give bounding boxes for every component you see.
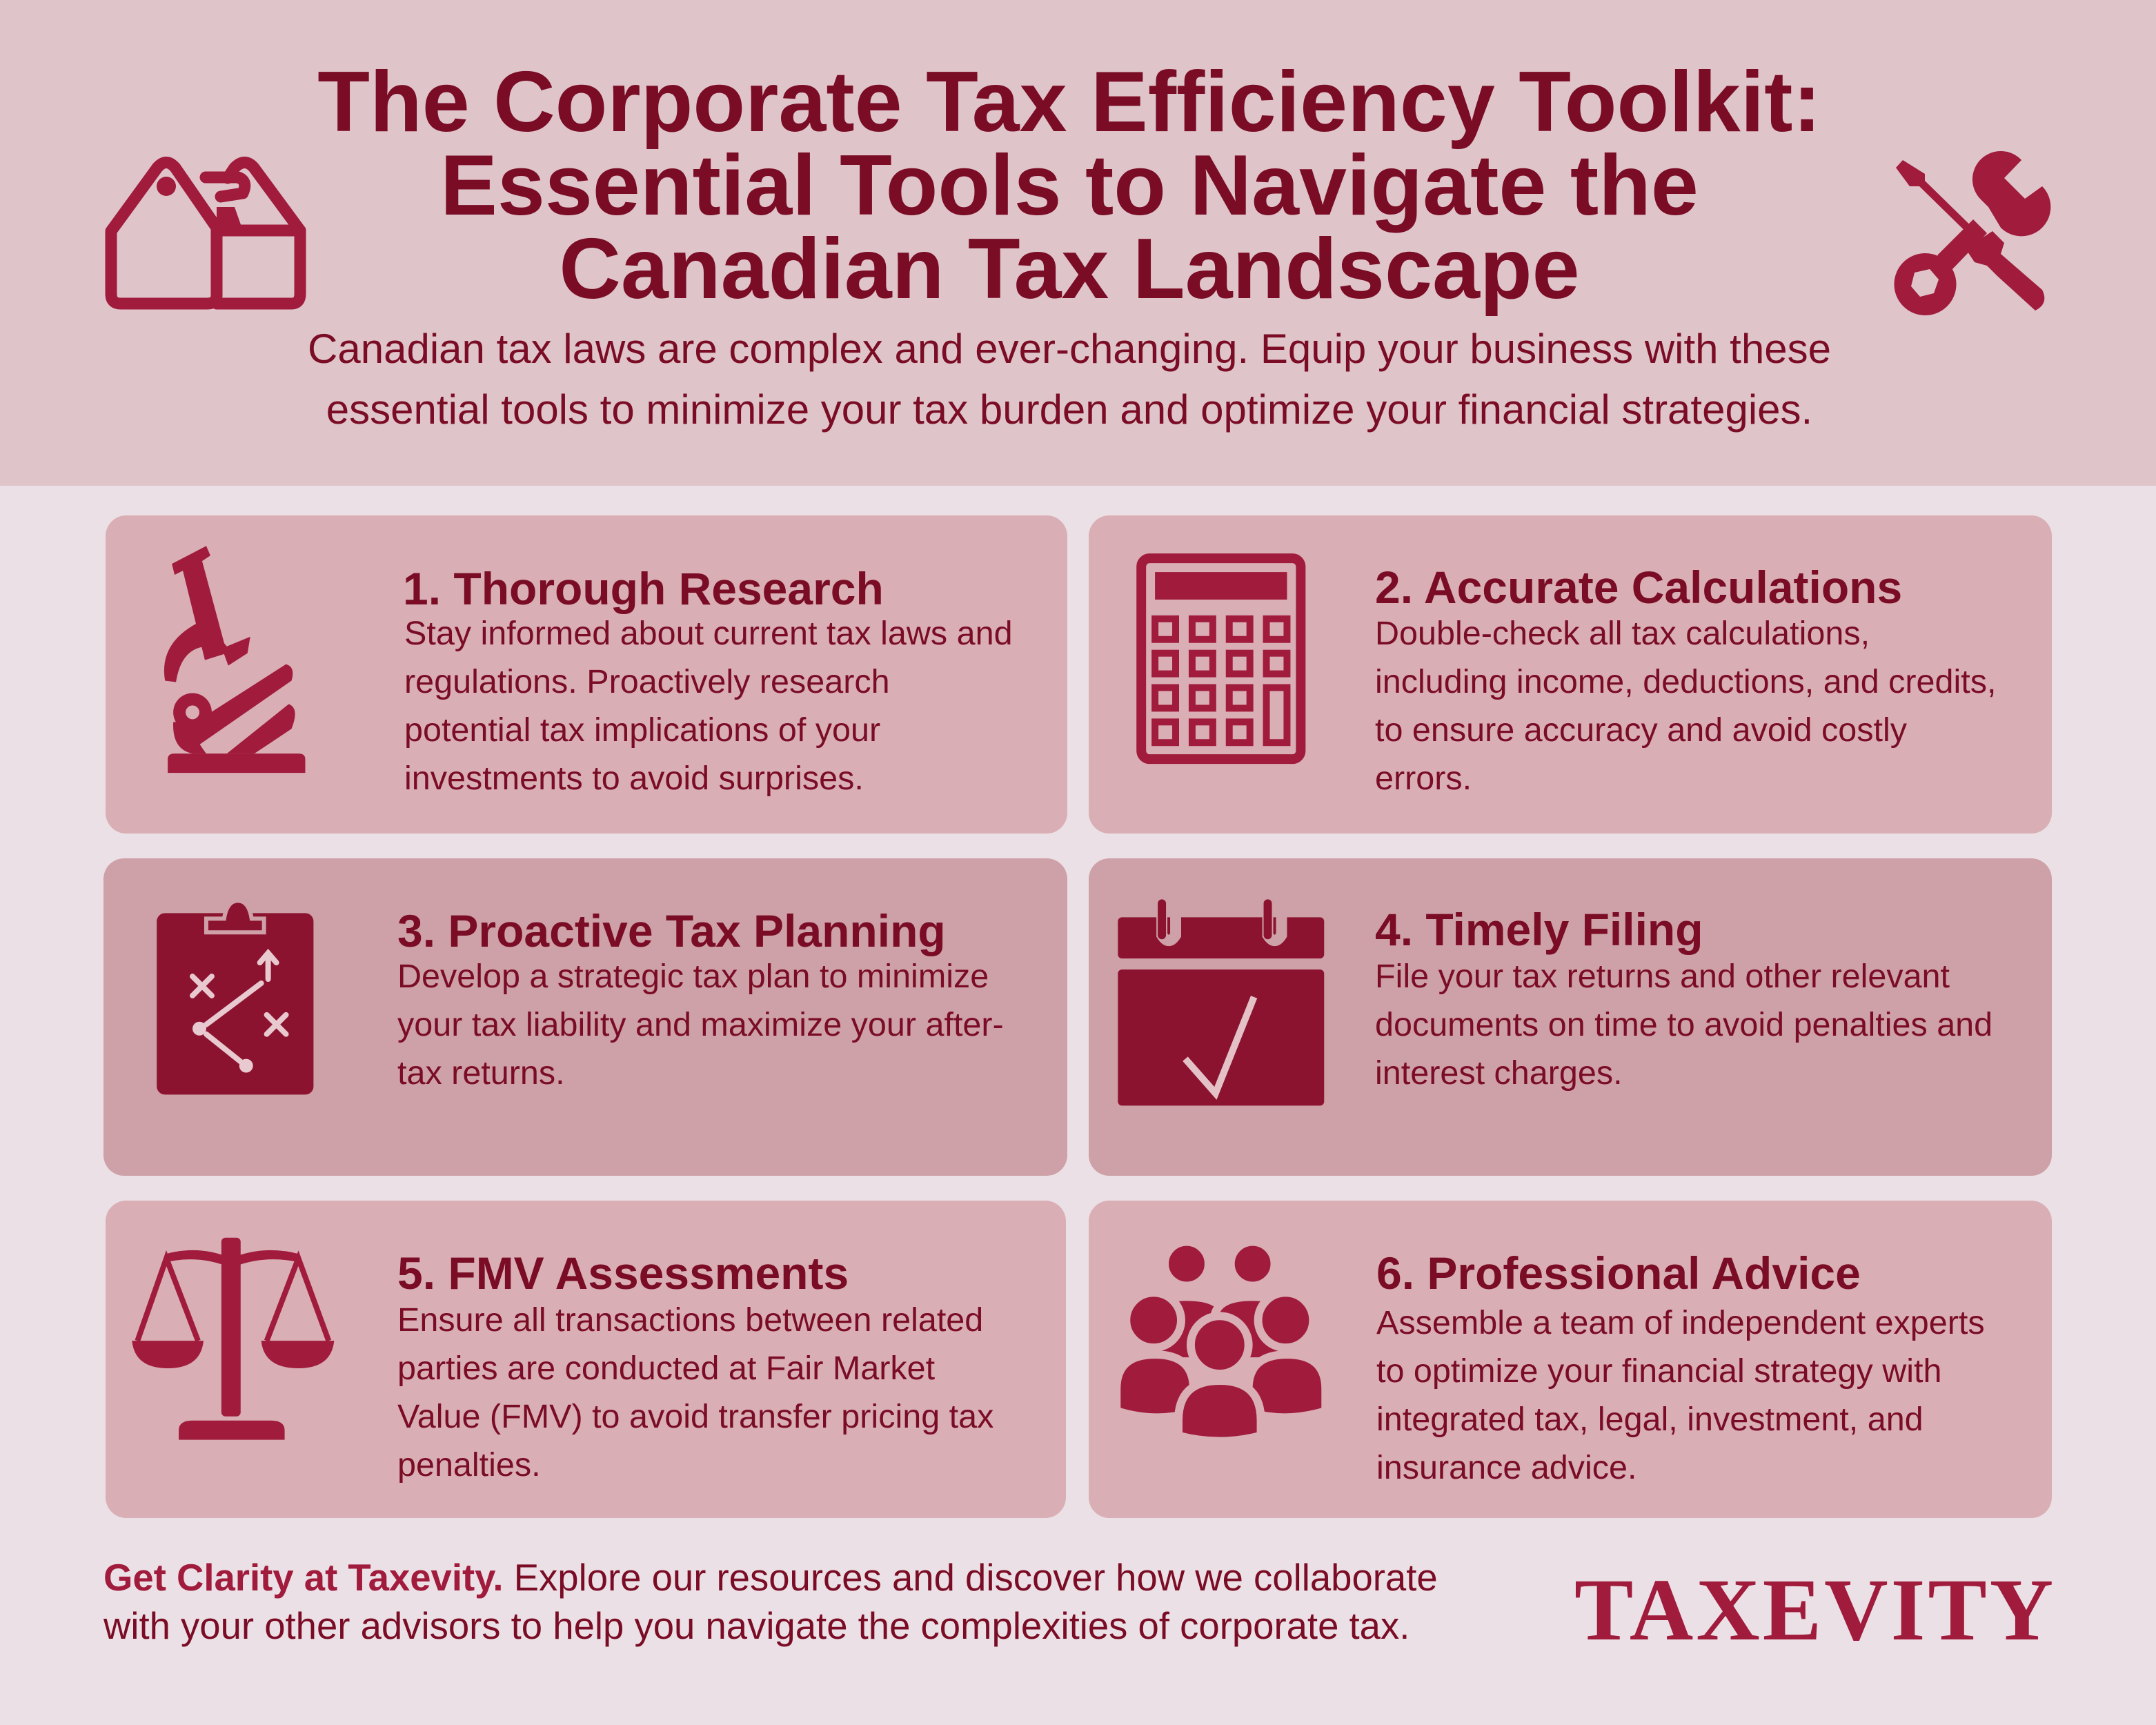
panel: professional advice: [1089, 1201, 2052, 1518]
header band: [0, 0, 2156, 486]
text 2: including income, deductions, and credits,: [1375, 663, 1996, 700]
text 1: regulations. Proactively research: [404, 663, 890, 700]
panel: fmv assessments: [106, 1201, 1066, 1518]
text 6: integrated tax, legal, investment, and: [1376, 1401, 1923, 1438]
heading 2: 2. Accurate Calculations: [1375, 562, 1902, 613]
heading 4: 4. Timely Filing: [1375, 904, 1703, 955]
text 5: parties are conducted at Fair Market: [397, 1350, 935, 1387]
title: Canadian Tax Landscape: [559, 221, 1580, 317]
text 6: Assemble a team of independent experts: [1376, 1304, 1985, 1341]
logo: TAXEVITY: [1574, 1561, 2056, 1659]
text 5: Ensure all transactions between related: [397, 1301, 983, 1339]
subtitle: essential tools to minimize your tax burden and optimize your financial strategies.: [326, 386, 1812, 433]
icon: calculator: [1141, 558, 1300, 759]
title: Essential Tools to Navigate the: [440, 138, 1699, 233]
text 2: Double-check all tax calculations,: [1375, 615, 1870, 652]
panel: thorough research: [106, 515, 1067, 834]
icon: scale of justice: [132, 1238, 334, 1440]
text 5: Value (FMV) to avoid transfer pricing tax: [397, 1398, 993, 1435]
text 3: Develop a strategic tax plan to minimize: [397, 958, 989, 995]
text 2: to ensure accuracy and avoid costly: [1375, 711, 1907, 749]
footer text: Get Clarity at Taxevity. Explore our resources and discover how we collaborate: [103, 1557, 1438, 1599]
icon: toolbox: [111, 163, 300, 304]
subtitle: [308, 326, 1831, 433]
panel: proactive tax planning: [103, 858, 1067, 1176]
text 2: errors.: [1375, 760, 1472, 797]
subtitle: Canadian tax laws are complex and ever-changing. Equip your business with these: [308, 326, 1831, 372]
text 3: [397, 958, 1004, 1092]
heading 6: 6. Professional Advice: [1376, 1248, 1861, 1299]
text 6: to optimize your financial strategy with: [1376, 1352, 1941, 1390]
heading 1: 1. Thorough Research: [403, 563, 884, 614]
text 5: penalties.: [397, 1446, 541, 1483]
text 4: documents on time to avoid penalties and: [1375, 1006, 1992, 1043]
text 1: investments to avoid surprises.: [404, 760, 864, 797]
text 4: [1375, 958, 1992, 1092]
title: [317, 55, 1821, 317]
text 2: [1375, 615, 1996, 797]
text 5: [397, 1301, 993, 1483]
icon: clipboard: [157, 900, 313, 1094]
heading 5: 5. FMV Assessments: [397, 1248, 849, 1299]
text 1: potential tax implications of your: [404, 711, 880, 749]
title: The Corporate Tax Efficiency Toolkit:: [317, 55, 1821, 150]
footer text: with your other advisors to help you navigate the complexities of corporate tax.: [103, 1605, 1410, 1647]
text 6: [1376, 1304, 1985, 1486]
text 3: tax returns.: [397, 1054, 565, 1092]
panel: timely filing: [1089, 858, 2052, 1176]
text 3: your tax liability and maximize your after-: [397, 1006, 1004, 1043]
footer text: [103, 1557, 1438, 1647]
icon: calendar: [1118, 903, 1324, 1105]
panel: accurate calculations: [1089, 515, 2052, 834]
text 1: Stay informed about current tax laws and: [404, 615, 1013, 652]
icon: tools: [1895, 151, 2050, 315]
text 6: insurance advice.: [1376, 1449, 1636, 1486]
text 4: interest charges.: [1375, 1054, 1623, 1092]
icon: microscope: [164, 546, 305, 773]
heading 3: 3. Proactive Tax Planning: [397, 905, 946, 956]
text 1: [404, 615, 1013, 797]
icon: people: [1116, 1242, 1325, 1441]
text 4: File your tax returns and other relevant: [1375, 958, 1950, 995]
